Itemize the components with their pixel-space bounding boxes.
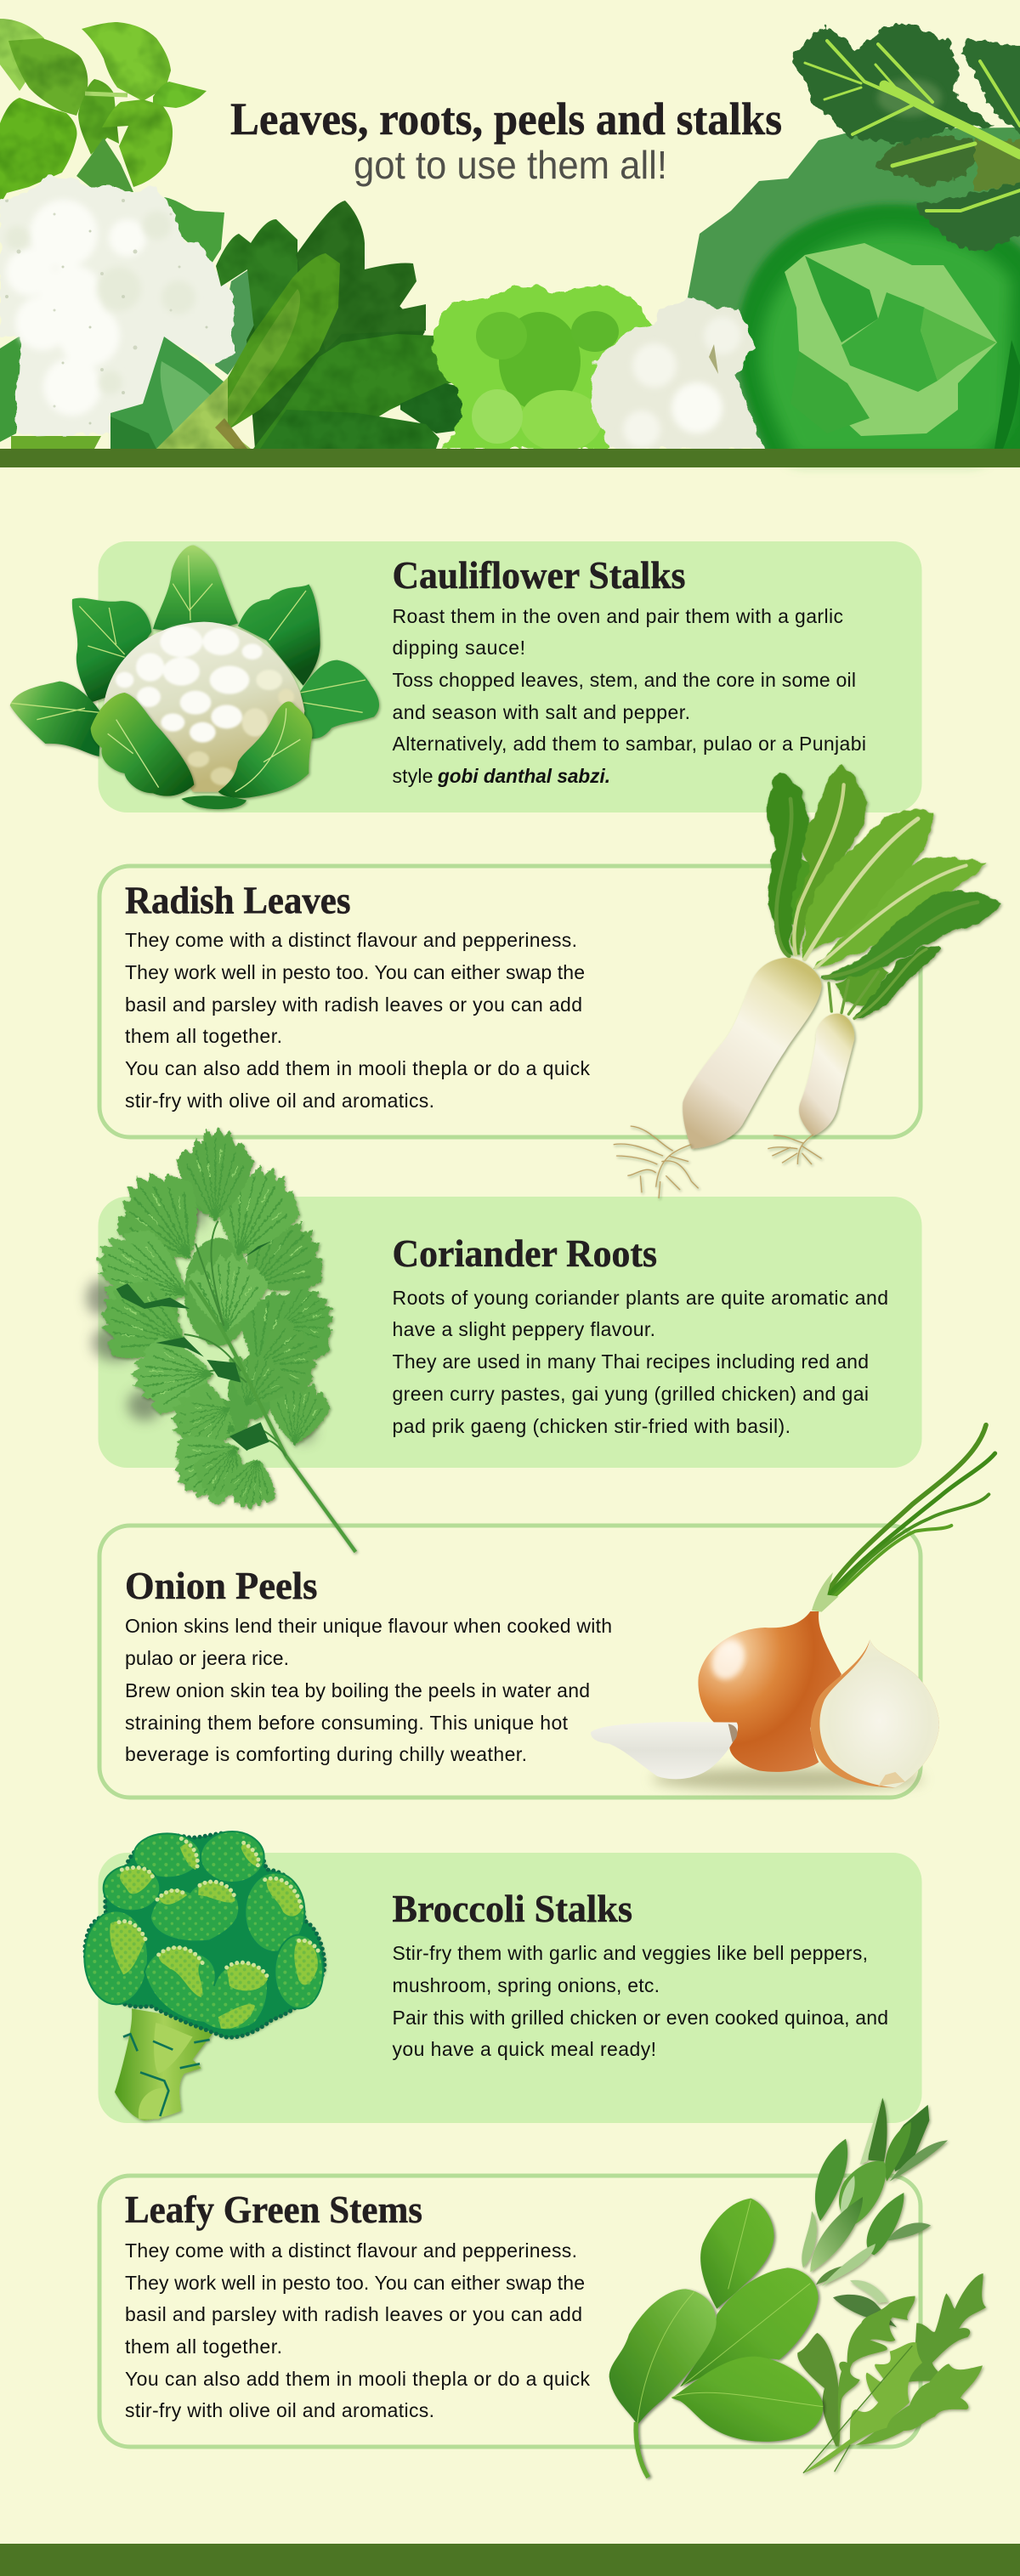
text block: onion peels xyxy=(125,1615,612,1765)
illustration: basil leaves xyxy=(0,19,207,205)
icon: leafy greens xyxy=(609,2098,986,2477)
icon: cauliflower xyxy=(10,546,379,809)
text block: leafy green stems: They come with a distinct flavour and pepperiness. xyxy=(125,2239,577,2262)
text block: broccoli stalks: Pair this with grilled chicken or even cooked quinoa, and xyxy=(393,2007,888,2029)
illustration: large cauliflower xyxy=(0,138,255,449)
text block: coriander roots: pad prik gaeng (chicken stir-fried with basil). xyxy=(393,1415,790,1437)
text block: cauliflower stalks: Roast them in the oven and pair them with a garlic xyxy=(393,605,843,627)
text block: coriander roots: Roots of young coriander plants are quite aromatic and xyxy=(393,1287,888,1309)
panel: radish leaves xyxy=(99,866,921,1137)
illustration: cabbage xyxy=(687,127,1020,459)
text block: onion peels: straining them before consuming. This unique hot xyxy=(125,1712,569,1734)
panel: cauliflower stalks xyxy=(99,541,921,812)
heading: cauliflower stalks: Cauliflower Stalks xyxy=(393,553,685,597)
text block: broccoli stalks: mushroom, spring onions, etc. xyxy=(393,1974,660,1996)
title: Leaves, roots, peels and stalks xyxy=(230,93,782,144)
text block: onion peels: Brew onion skin tea by boiling the peels in water and xyxy=(125,1679,590,1701)
footer strip xyxy=(0,2544,1020,2576)
icon: coriander xyxy=(79,1127,355,1552)
green strip under banner xyxy=(0,449,1020,467)
heading: broccoli stalks: Broccoli Stalks xyxy=(393,1887,632,1930)
text block: coriander roots: have a slight peppery flavour. xyxy=(393,1318,655,1340)
text block: radish leaves: basil and parsley with radish leaves or you can add xyxy=(125,994,582,1016)
icon: broccoli xyxy=(84,1832,325,2120)
text block: coriander roots: green curry pastes, gai yung (grilled chicken) and gai xyxy=(393,1383,869,1405)
text block: cauliflower stalks: style xyxy=(393,765,434,787)
text block: cauliflower stalks: Toss chopped leaves, stem, and the core in some oil xyxy=(393,669,856,691)
text block: cauliflower stalks: Alternatively, add them to sambar, pulao or a Punjabi xyxy=(393,733,866,755)
spinach leaves xyxy=(609,2199,823,2477)
text block: cauliflower stalks: and season with salt and pepper. xyxy=(393,701,690,723)
panel: coriander roots xyxy=(99,1197,921,1468)
text block: radish leaves: them all together. xyxy=(125,1025,282,1047)
text block: broccoli stalks: Stir-fry them with garlic and veggies like bell peppers, xyxy=(393,1942,868,1964)
text block: coriander roots: They are used in many Thai recipes including red and xyxy=(393,1350,869,1373)
text block: radish leaves: They work well in pesto too. You can either swap the xyxy=(125,961,585,983)
text block: cauliflower stalks xyxy=(393,605,866,787)
heading: onion peels: Onion Peels xyxy=(125,1564,318,1607)
illustration: small cauliflower xyxy=(589,297,765,449)
text block: leafy green stems: them all together. xyxy=(125,2335,282,2358)
text block: leafy green stems: You can also add them in mooli thepla or do a quick xyxy=(125,2368,590,2390)
banner illustration: vegetables xyxy=(0,19,1020,459)
heading: radish leaves: Radish Leaves xyxy=(125,879,350,921)
text block: leafy green stems xyxy=(125,2239,590,2421)
text block: leafy green stems: basil and parsley with radish leaves or you can add xyxy=(125,2303,582,2325)
text block: radish leaves: stir-fry with olive oil and aromatics. xyxy=(125,1090,434,1112)
illustration: lettuce xyxy=(433,284,653,451)
text block: radish leaves: They come with a distinct flavour and pepperiness. xyxy=(125,929,577,951)
text block: cauliflower stalks: dipping sauce! xyxy=(393,637,525,659)
text block: onion peels: pulao or jeera rice. xyxy=(125,1647,289,1669)
icon: onion xyxy=(591,1425,995,1791)
sage sprig xyxy=(802,2098,948,2327)
ground shadow xyxy=(652,1768,924,1791)
text block: leafy green stems: stir-fry with olive oil and aromatics. xyxy=(125,2399,434,2421)
heading: leafy green stems: Leafy Green Stems xyxy=(125,2188,422,2231)
subtitle: got to use them all! xyxy=(354,143,667,187)
text block: leafy green stems: They work well in pesto too. You can either swap the xyxy=(125,2272,585,2294)
text block: cauliflower stalks: gobi danthal sabzi. xyxy=(437,765,610,787)
panel: leafy green stems xyxy=(99,2176,921,2447)
text block: onion peels: beverage is comforting during chilly weather. xyxy=(125,1743,527,1765)
text block: broccoli stalks: you have a quick meal ready! xyxy=(393,2038,656,2060)
text block: radish leaves: You can also add them in mooli thepla or do a quick xyxy=(125,1057,590,1079)
text block: onion peels: Onion skins lend their unique flavour when cooked with xyxy=(125,1615,612,1637)
text block: radish leaves xyxy=(125,929,590,1112)
illustration: kale xyxy=(790,24,1020,252)
arugula xyxy=(797,2273,986,2473)
panel: onion peels xyxy=(99,1526,921,1798)
heading: coriander roots: Coriander Roots xyxy=(393,1231,657,1275)
panel: broccoli stalks xyxy=(99,1853,921,2123)
text block: broccoli stalks xyxy=(393,1942,888,2060)
illustration: spinach bunch xyxy=(156,201,498,449)
text block: coriander roots xyxy=(393,1287,888,1437)
icon: radish xyxy=(614,766,1001,1198)
